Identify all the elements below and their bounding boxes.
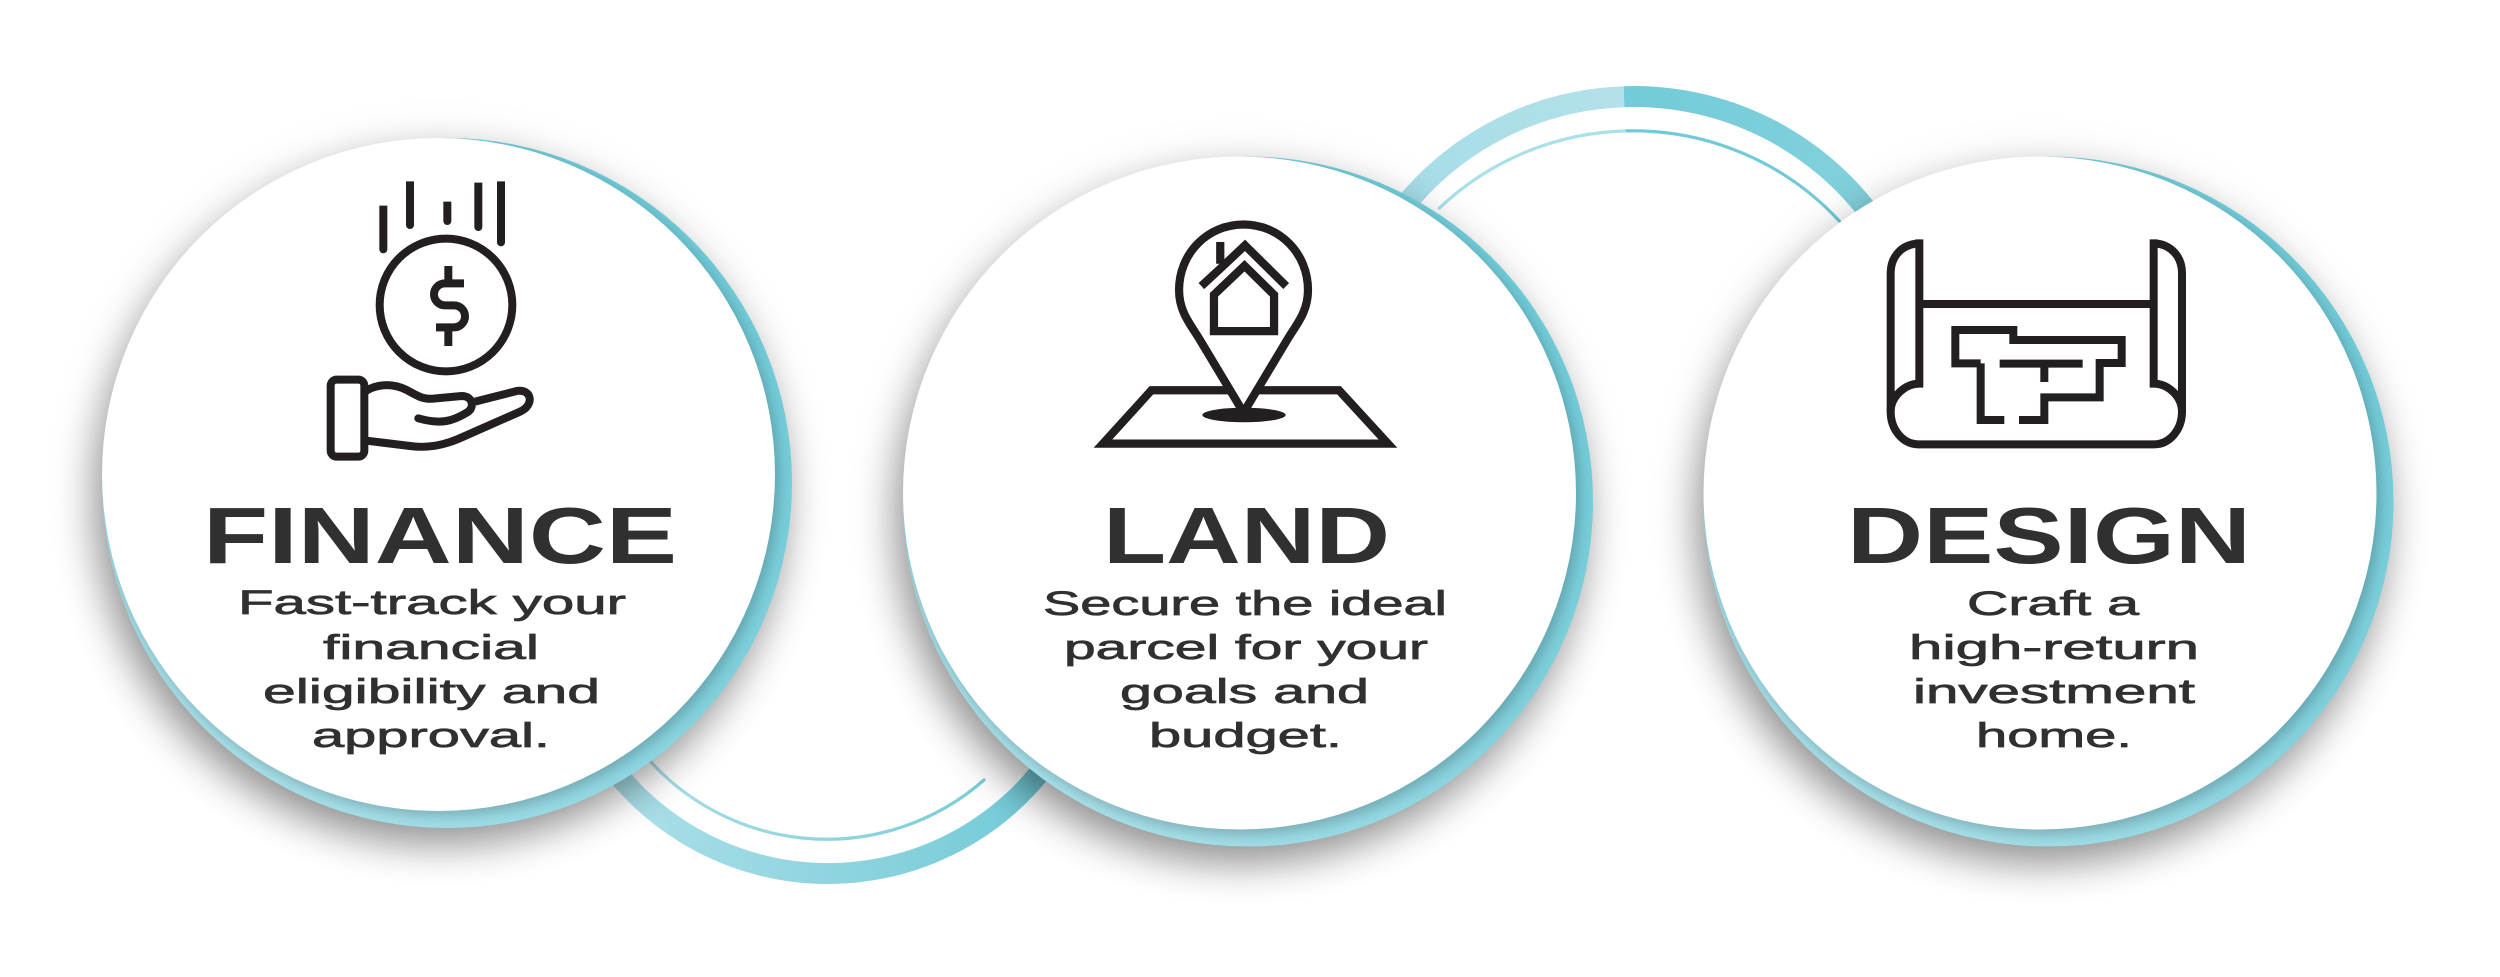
arc connector: finance to land (593, 739, 1063, 874)
text: land description: parcel for your (1064, 629, 1428, 667)
icon: map pin with house on parcel (1103, 225, 1388, 444)
icon: blueprint scroll with floor plan (1891, 239, 2182, 444)
panel: land (895, 156, 1593, 863)
text: land description: budget. (1149, 717, 1342, 755)
text: land description: goals and (1120, 673, 1369, 711)
text: design description (1909, 585, 2199, 755)
text: finance description (238, 584, 626, 755)
heading: LAND: LAND (1103, 491, 1390, 580)
text: finance description: approval. (312, 717, 550, 755)
icon: coin falling into hand (331, 181, 530, 457)
panel: design (1696, 156, 2394, 863)
text: finance description: financial (323, 629, 539, 667)
text: design description: home. (1976, 717, 2132, 755)
text: land description (1043, 585, 1447, 755)
text: finance description: eligibility and (263, 673, 600, 711)
text: design description: high-return (1909, 629, 2199, 667)
panel: finance (94, 138, 792, 844)
heading: DESIGN: DESIGN (1847, 491, 2251, 580)
arc connector: land to design (1394, 97, 1874, 221)
text: finance description: Fast-track your (238, 584, 626, 622)
text: land description: Secure the ideal (1043, 585, 1447, 623)
text: design description: Craft a (1967, 585, 2139, 623)
heading: FINANCE: FINANCE (203, 491, 677, 580)
text: design description: investment (1913, 673, 2196, 711)
infographic: finance, land, design (66, 86, 2414, 890)
